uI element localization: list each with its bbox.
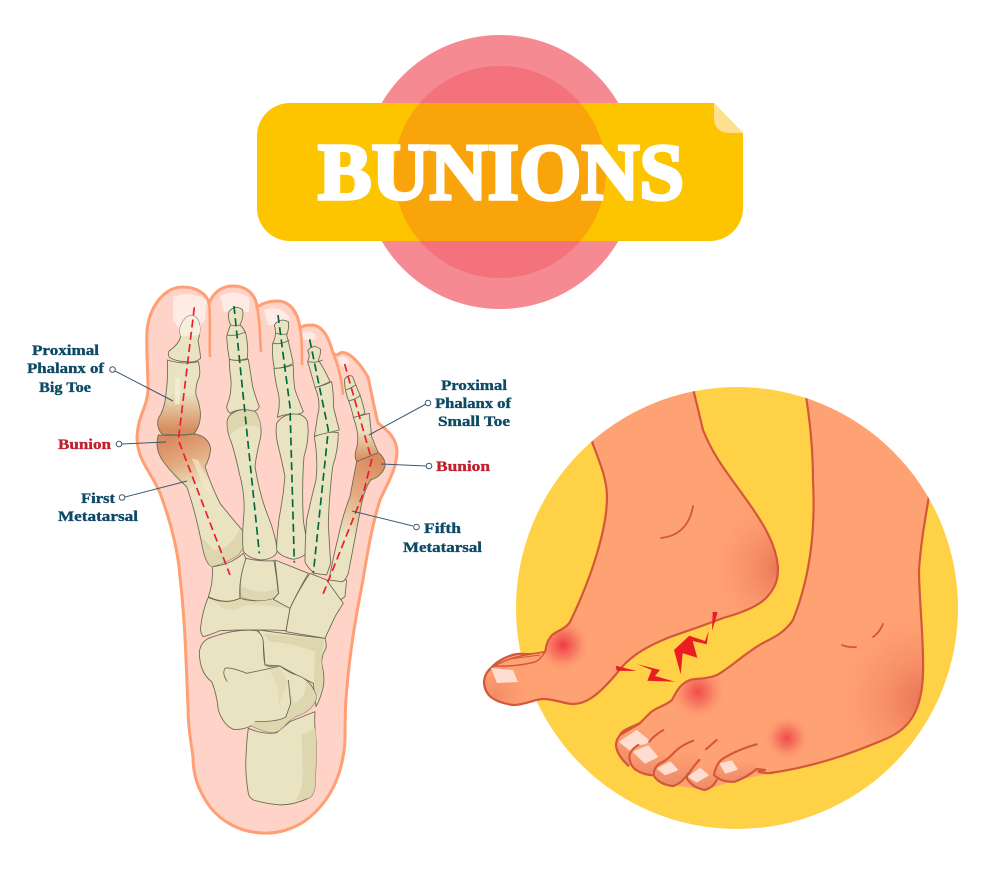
label: proximal phalanx of small toe: [369, 378, 512, 435]
banner corner fold: [714, 103, 743, 133]
label: proximal phalanx of big toe: Proximal: [32, 343, 99, 359]
tarsal bones: [199, 553, 347, 805]
label: first metatarsal: First: [81, 491, 115, 507]
fourth toe bones: [305, 347, 339, 575]
toe crease: [706, 740, 717, 749]
label: proximal phalanx of big toe: Big Toe: [39, 380, 91, 396]
toe 1: [616, 723, 663, 766]
pain lightning: [616, 612, 718, 682]
label: proximal phalanx of small toe: Small Toe: [438, 414, 510, 430]
toe 2: [629, 743, 668, 775]
alignment lines: [234, 306, 259, 553]
toe and metatarsal bones: [157, 306, 385, 597]
label: bunion right: [381, 459, 491, 475]
ankle creases: [842, 624, 883, 647]
title badge: [257, 35, 743, 309]
panel: foot skeleton: [137, 286, 397, 833]
orange overlap: [394, 103, 606, 241]
label: proximal phalanx of small toe: Phalanx of: [435, 396, 512, 412]
toe 3: [654, 741, 699, 786]
toe 4: [687, 760, 717, 790]
second toe bones: [227, 307, 277, 560]
outer pink circle: [363, 35, 637, 309]
label: bunion left: [58, 437, 166, 453]
right foot: [619, 398, 930, 789]
right foot toes: [616, 723, 773, 790]
left foot: [482, 391, 780, 706]
toenails: [173, 292, 350, 367]
yellow banner: [257, 103, 743, 241]
label: first metatarsal: Metatarsal: [58, 509, 138, 525]
yellow circle: [516, 387, 958, 829]
label: proximal phalanx of big toe: [27, 343, 173, 401]
label: first metatarsal: [58, 481, 187, 525]
label: fifth metatarsal: Metatarsal: [403, 540, 482, 556]
panel: feet illustration: [482, 387, 958, 829]
label: proximal phalanx of small toe: Proximal: [441, 378, 507, 394]
fifth toe bones: [329, 376, 385, 582]
second toe peeking: [495, 652, 545, 666]
big toe bones: [157, 315, 246, 567]
label: bunion right: Bunion: [436, 459, 491, 475]
title: BUNIONS: [318, 129, 684, 217]
big toenail: [491, 668, 518, 683]
third toe bones: [272, 320, 309, 559]
ankle crease: [661, 506, 693, 538]
inner pink circle: [394, 66, 606, 278]
foot outline: [137, 286, 397, 833]
toe clefts: [209, 303, 343, 395]
label: bunion left: Bunion: [58, 437, 112, 453]
toe 5: [714, 744, 773, 782]
label: fifth metatarsal: [352, 511, 482, 556]
label: fifth metatarsal: Fifth: [424, 521, 462, 537]
label: proximal phalanx of big toe: Phalanx of: [27, 361, 105, 377]
